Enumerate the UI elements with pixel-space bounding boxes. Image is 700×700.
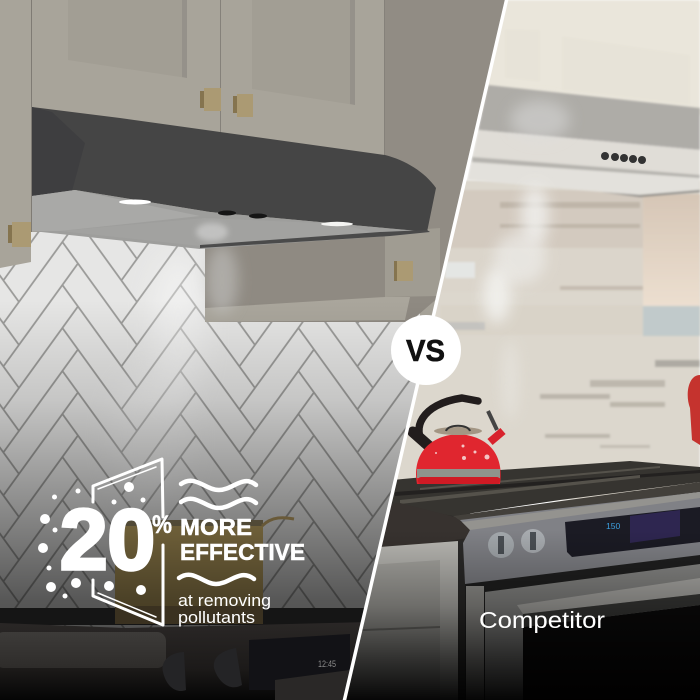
panel: competitor kitchen (338, 0, 700, 700)
text: at removing pollutants: at removing (178, 592, 271, 610)
left side cabinet (0, 0, 31, 268)
range hood body (32, 107, 436, 249)
icon: air wave bottom (179, 575, 254, 584)
hood control knobs (601, 152, 646, 164)
red kettle (413, 398, 503, 484)
lower cabinet (348, 541, 458, 697)
text: at removing pollutants: pollutants (178, 609, 255, 627)
text: more effective: EFFECTIVE (180, 539, 305, 565)
stat: percent sign: % (152, 511, 172, 539)
display clock: 12:45 (318, 659, 336, 670)
towel (0, 632, 166, 668)
second red kettle at edge (688, 375, 700, 445)
bottom shade (340, 530, 700, 700)
divider line (344, 0, 507, 700)
range display panel: 150 (606, 521, 620, 531)
text: more effective: MORE (180, 514, 252, 540)
cooktop and range (0, 606, 370, 700)
counter top (382, 503, 470, 546)
icon: door frame with particles (93, 459, 163, 625)
label: competitor: Competitor (479, 607, 605, 633)
display panel (249, 634, 350, 690)
stat: 20: 20 (60, 493, 155, 588)
control knobs (163, 648, 242, 691)
icon: pollutant dots (38, 482, 146, 598)
competitor hood (467, 85, 700, 197)
upper cabinets (31, 0, 505, 316)
base fill behind stove area (392, 502, 470, 543)
competitor cabinets (482, 0, 700, 114)
panel: featured range hood kitchen (0, 0, 510, 700)
competitor backsplash tiles (397, 180, 700, 501)
stainless pot (115, 518, 294, 615)
VS badge (391, 315, 461, 385)
cabinet handles (8, 88, 253, 247)
backsplash herringbone tile (0, 225, 420, 632)
text: at removing pollutants (178, 592, 271, 627)
icon: air waves top (181, 481, 256, 508)
VS badge: VS (406, 333, 445, 368)
range knobs (488, 529, 545, 558)
stove grates (392, 461, 700, 522)
competitor steam plume (483, 100, 570, 420)
range display panel (565, 507, 700, 557)
lower-right wall cabinet (205, 228, 440, 322)
competitor wall cabinet side (643, 194, 700, 336)
steam on backsplash (110, 255, 204, 510)
range body (460, 492, 700, 700)
callout: 20% more effective (38, 459, 305, 627)
text: more effective (180, 514, 305, 565)
dark bottom gradient (0, 326, 416, 628)
